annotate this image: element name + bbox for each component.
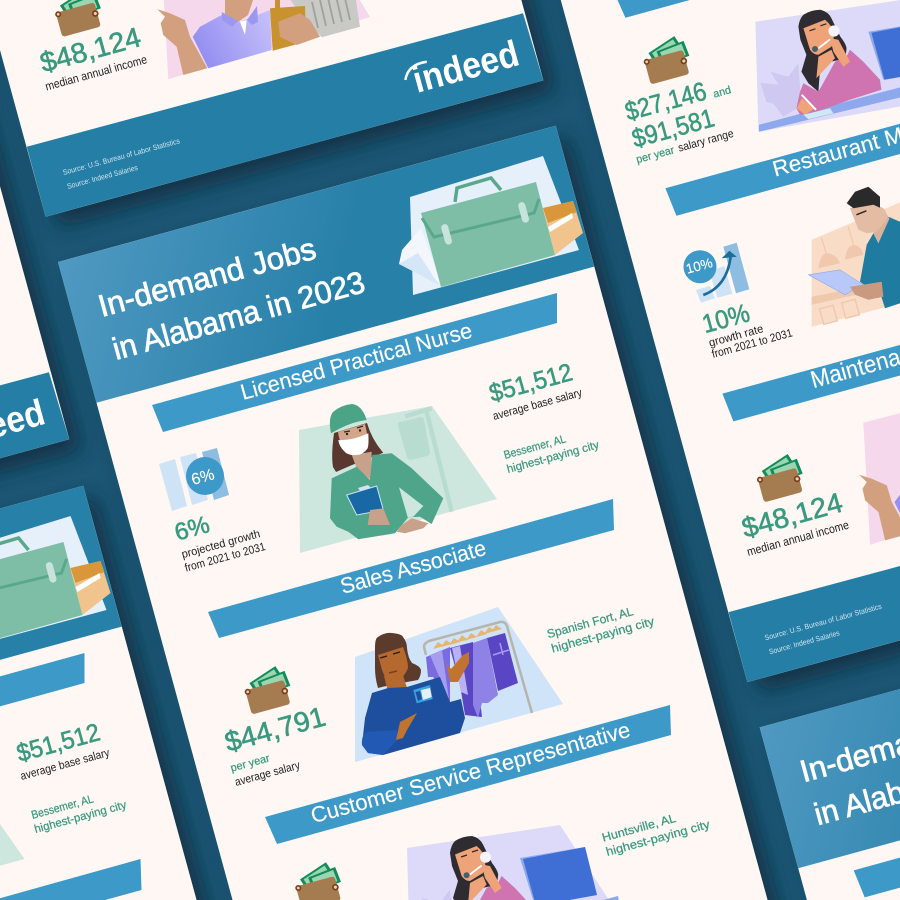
stat: highest-paying city: Spanish Fort, AL bbox=[545, 604, 635, 641]
header band bbox=[760, 591, 900, 868]
stat: salary range: and bbox=[712, 84, 732, 101]
icon: wallet bbox=[752, 452, 807, 503]
illustration: nurse bbox=[299, 404, 497, 553]
stat: average salary: per year bbox=[229, 752, 271, 775]
sources: Source: U.S. Bureau of Labor Statistics bbox=[764, 602, 883, 642]
stat: salary range: $91,581 bbox=[629, 102, 718, 154]
banner: sales associate bbox=[208, 499, 614, 638]
banner: restaurant manager bbox=[665, 77, 900, 216]
banner: licensed practical nurse bbox=[152, 293, 557, 432]
banner: maintenance bbox=[722, 283, 900, 421]
sources: Source: U.S. Bureau of Labor Statistics bbox=[62, 136, 181, 177]
stat: median annual income: $48,124 bbox=[738, 487, 846, 544]
stat: average base salary: average base salary bbox=[492, 387, 584, 423]
stat: highest-paying city: highest-paying city bbox=[506, 439, 601, 476]
illustration: maintenance worker bbox=[157, 0, 370, 79]
illustration: restaurant manager bbox=[808, 182, 900, 327]
logo: indeed bbox=[408, 33, 523, 101]
stat: highest-paying city: highest-paying city bbox=[550, 614, 656, 656]
stat: average base salary: average base salary bbox=[19, 747, 111, 783]
title bbox=[796, 696, 900, 832]
stat: highest-paying city: highest-paying city bbox=[604, 817, 711, 859]
banner: customer service representative bbox=[613, 0, 900, 18]
illustration: customer service representative bbox=[407, 825, 622, 900]
stat: growth rate: from 2021 to 2031 bbox=[711, 327, 794, 361]
title: In-demand Jobs bbox=[94, 231, 320, 324]
header band bbox=[0, 486, 122, 763]
stat: growth rate: 10% bbox=[699, 297, 753, 339]
icon: wallet bbox=[51, 0, 106, 37]
stat: average base salary: $51,512 bbox=[14, 718, 103, 768]
banner: customer service representative bbox=[265, 705, 671, 844]
sources bbox=[62, 136, 181, 191]
stat: median annual income: median annual income bbox=[44, 52, 149, 93]
stat: growth rate bbox=[699, 297, 794, 361]
illustration: maintenance worker bbox=[859, 383, 900, 545]
stat: highest-paying city: Bessemer, AL bbox=[30, 793, 96, 822]
page panel bbox=[760, 591, 900, 900]
banner text: Licensed Practical Nurse bbox=[238, 318, 475, 405]
stat: salary range bbox=[622, 76, 735, 166]
stat: average base salary: $51,512 bbox=[486, 358, 576, 408]
illustration: briefcase bbox=[0, 516, 110, 655]
stat: growth rate: growth rate bbox=[708, 323, 765, 350]
stat: highest-paying city bbox=[545, 604, 656, 656]
stat: salary range: $27,146 bbox=[622, 76, 710, 127]
stat: average salary: average salary bbox=[234, 760, 302, 789]
illustration: nurse bbox=[0, 764, 24, 900]
sources: Source: Indeed Salaries bbox=[768, 628, 841, 656]
illustration: sales associate bbox=[355, 607, 563, 762]
stat: salary range: salary range bbox=[677, 128, 735, 155]
stat: projected growth: from 2021 to 2031 bbox=[184, 541, 267, 575]
icon: wallet bbox=[291, 860, 346, 900]
stat: highest-paying city: highest-paying city bbox=[33, 799, 128, 836]
page panel bbox=[406, 0, 900, 682]
sheet: right column lower page bbox=[760, 591, 900, 900]
banner text: Customer Service Representative bbox=[308, 717, 633, 828]
banner: licensed practical nurse bbox=[0, 653, 84, 792]
icon: 10% growth bars bbox=[684, 243, 749, 303]
icon: wallet bbox=[240, 664, 295, 715]
stat: projected growth bbox=[172, 511, 267, 575]
sources: Source: Indeed Salaries bbox=[66, 163, 139, 191]
icon: wallet bbox=[639, 34, 694, 85]
icon: 6% bars bbox=[159, 448, 229, 511]
sheet: bottom of previous page, left column bbox=[0, 0, 69, 576]
footer band bbox=[0, 372, 69, 576]
stat: average salary bbox=[221, 701, 329, 789]
stat: highest-paying city: Huntsville, AL bbox=[600, 811, 678, 845]
icon: 6% bars: 6% bbox=[190, 466, 216, 489]
header band bbox=[58, 126, 594, 403]
title: in Alabama in 2023 bbox=[109, 264, 369, 367]
footer band bbox=[27, 13, 543, 217]
page panel bbox=[0, 486, 424, 900]
sheet: left column page bbox=[0, 486, 424, 900]
banner: sales associate bbox=[0, 859, 142, 900]
stat: median annual income: median annual income bbox=[745, 518, 851, 559]
stat: projected growth: projected growth bbox=[180, 528, 262, 561]
banner: licensed practical nurse bbox=[854, 758, 900, 897]
page panel bbox=[0, 0, 543, 217]
sheet: right column upper page bbox=[406, 0, 900, 682]
stat: highest-paying city: Bessemer, AL bbox=[503, 433, 568, 462]
stat: median annual income: $48,124 bbox=[37, 21, 144, 78]
stat: salary range: per year bbox=[635, 144, 676, 166]
sheet: bottom of previous page, centre column bbox=[0, 0, 543, 217]
illustration: briefcase bbox=[399, 156, 583, 295]
banner text: Sales Associate bbox=[337, 535, 489, 599]
sources bbox=[764, 602, 883, 656]
stat: projected growth: 6% bbox=[172, 511, 213, 546]
page panel bbox=[0, 0, 69, 576]
stat: average salary: $44,791 bbox=[221, 701, 329, 758]
footer band bbox=[729, 479, 900, 682]
illustration: customer service representative bbox=[755, 0, 900, 132]
icon: 10% growth bars: 10% bbox=[684, 255, 714, 277]
